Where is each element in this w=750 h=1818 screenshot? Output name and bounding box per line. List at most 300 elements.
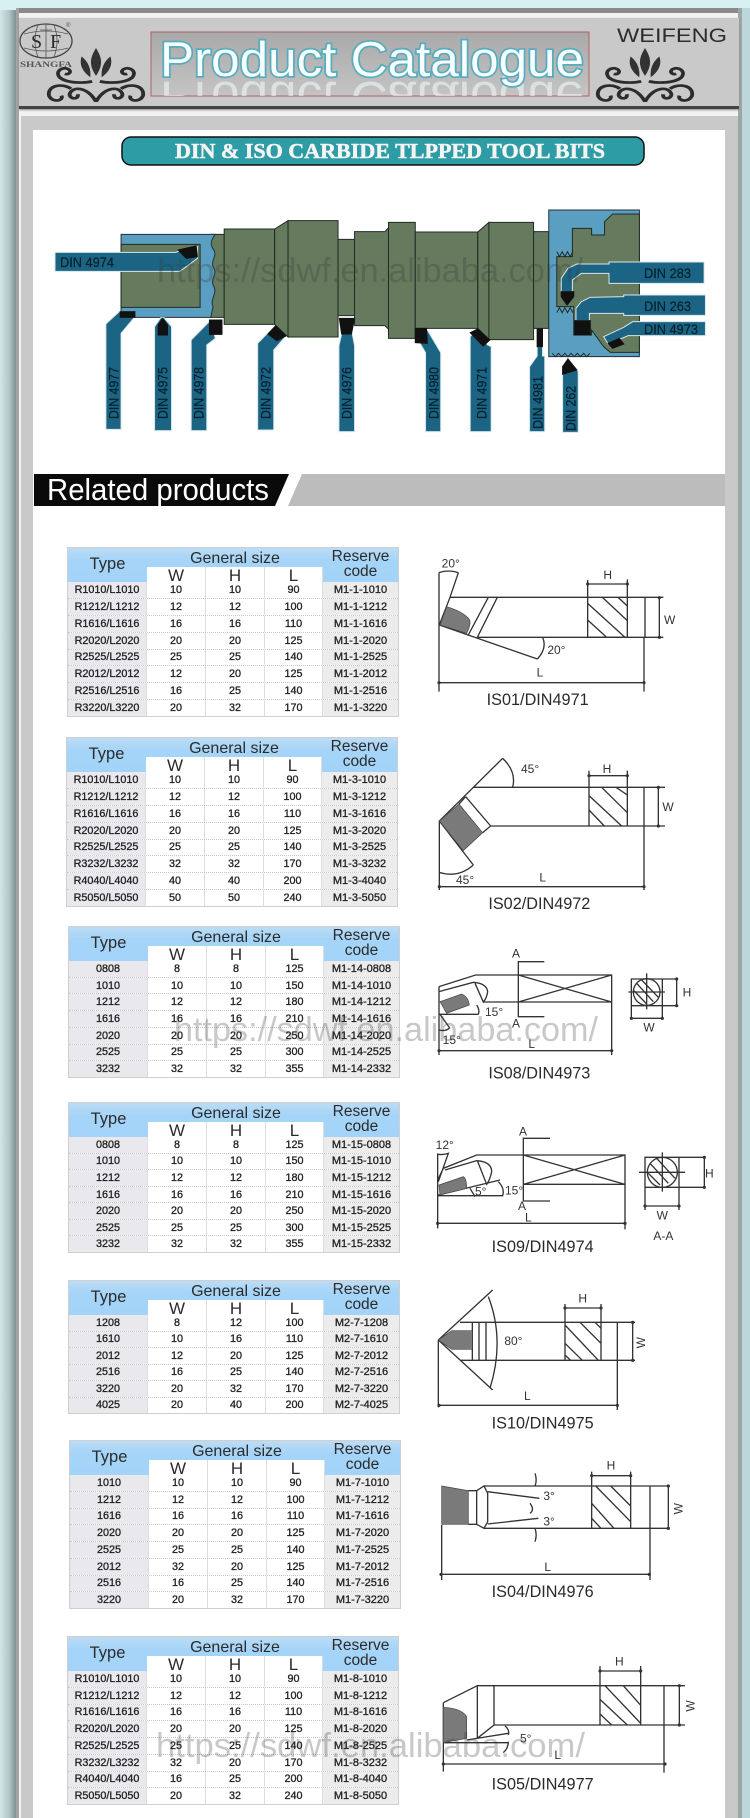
drawing IS08/DIN4973: W bbox=[643, 1020, 655, 1034]
table 1 rows: R1212/L1212 bbox=[75, 601, 139, 613]
tool DIN 263 bbox=[575, 295, 705, 335]
table 6 rows: 2020 bbox=[97, 1527, 121, 1539]
table 7 rows: 200 bbox=[284, 1773, 302, 1785]
table 2 rows: R5050/L5050 bbox=[74, 892, 138, 904]
table 4 rows: M1-15-2020 bbox=[332, 1205, 391, 1217]
table 5 rows: 20 bbox=[230, 1350, 242, 1362]
table 2 rows: 32 bbox=[228, 858, 240, 870]
drawing IS02/DIN4972: L bbox=[539, 871, 546, 885]
table 1 rows: R2020/L2020 bbox=[75, 635, 139, 647]
table 4 header: Type bbox=[91, 1110, 126, 1128]
table 6 rows: 1616 bbox=[97, 1510, 121, 1522]
brand name: WEIFENG bbox=[617, 25, 727, 47]
table 6 rows: 10 bbox=[231, 1477, 243, 1489]
table 3 rows: 25 bbox=[230, 1046, 242, 1058]
table 1 rows: 12 bbox=[170, 601, 182, 613]
table 6 rows: M1-7-2020 bbox=[336, 1527, 389, 1539]
table 5 rows: M2-7-2012 bbox=[335, 1350, 388, 1362]
table 1 rows: M1-1-1616 bbox=[334, 618, 387, 630]
table 5 rows: 12 bbox=[230, 1317, 242, 1329]
drawing IS05/DIN4977: L bbox=[554, 1748, 561, 1762]
table 2 rows: M1-3-1616 bbox=[333, 808, 386, 820]
table 5 rows: M2-7-3220 bbox=[335, 1383, 388, 1395]
table 7 rows: 12 bbox=[170, 1690, 182, 1702]
table 7 rows: R3232/L3232 bbox=[75, 1757, 139, 1769]
lathe tooling diagram bbox=[55, 210, 705, 432]
tool labels: DIN 4975 bbox=[156, 367, 170, 419]
drawing IS10/DIN4975: W bbox=[634, 1336, 648, 1348]
table 4 rows: 16 bbox=[171, 1189, 183, 1201]
drawing IS01/DIN4971: W bbox=[664, 613, 676, 627]
tool labels bbox=[60, 255, 698, 431]
table 1 rows: M1-1-1010 bbox=[334, 584, 387, 596]
table 7 rows: 100 bbox=[284, 1690, 302, 1702]
drawing IS04/DIN4976: 3° bbox=[543, 1515, 555, 1529]
tool DIN 4971 bbox=[470, 329, 491, 432]
drawing IS02/DIN4972: 45° bbox=[456, 873, 474, 887]
table 6 rows: 125 bbox=[286, 1527, 304, 1539]
table 2 rows: M1-3-2525 bbox=[333, 841, 386, 853]
table 3 rows: 25 bbox=[171, 1046, 183, 1058]
drawing IS08/DIN4973: L bbox=[528, 1037, 535, 1051]
drawing IS09/DIN4974: A bbox=[519, 1125, 527, 1139]
table 7 rows: 170 bbox=[284, 1757, 302, 1769]
table 2 rows: 20 bbox=[228, 825, 240, 837]
drawing IS10/DIN4975: 80° bbox=[504, 1334, 523, 1348]
table 1 header: Reserve bbox=[332, 548, 389, 565]
table 3 rows: 2525 bbox=[96, 1046, 120, 1058]
table 1 rows: R3220/L3220 bbox=[75, 702, 139, 714]
table 1 rows bbox=[68, 582, 398, 716]
drawing IS09/DIN4974: W bbox=[657, 1209, 669, 1223]
drawing IS02/DIN4972 bbox=[439, 758, 674, 913]
table 7 header: Reserve bbox=[332, 1637, 389, 1654]
table 1 bbox=[68, 548, 398, 716]
table 4 rows: 180 bbox=[285, 1172, 304, 1184]
table 5 rows: 32 bbox=[230, 1383, 242, 1395]
table 7 rows: 20 bbox=[229, 1723, 241, 1735]
table 6 rows: M1-7-2012 bbox=[336, 1561, 389, 1573]
table 5 rows: M2-7-1208 bbox=[335, 1317, 388, 1329]
table 6 rows: 16 bbox=[172, 1577, 184, 1589]
drawing IS04/DIN4976: W bbox=[671, 1502, 685, 1514]
drawing IS10/DIN4975: H bbox=[578, 1292, 587, 1306]
right chuck bbox=[549, 210, 639, 357]
table 6 rows: 16 bbox=[231, 1510, 243, 1522]
drawing IS08/DIN4973: 15° bbox=[443, 1033, 461, 1047]
table 5 header: Type bbox=[91, 1288, 126, 1306]
table 1 rows: 16 bbox=[229, 618, 241, 630]
table 3 bbox=[69, 927, 399, 1077]
table 2 rows: 40 bbox=[228, 875, 240, 887]
table 3 rows: 12 bbox=[171, 996, 183, 1008]
table 3 rows: 12 bbox=[230, 996, 242, 1008]
table 2 rows: M1-3-2020 bbox=[333, 825, 386, 837]
tool labels: DIN 4974 bbox=[60, 255, 114, 270]
table 7 rows: R1212/L1212 bbox=[75, 1690, 139, 1702]
table 5 header: General size bbox=[191, 1283, 281, 1300]
table 6 rows bbox=[70, 1475, 400, 1608]
table 2 rows: 16 bbox=[169, 808, 181, 820]
drawing IS09/DIN4974: 5° bbox=[475, 1185, 487, 1199]
table 1 rows: 140 bbox=[284, 651, 302, 663]
tool labels: DIN 4976 bbox=[340, 367, 354, 419]
drawing IS02/DIN4972: H bbox=[603, 762, 611, 776]
table 6 rows: 140 bbox=[286, 1577, 304, 1589]
table 3 rows: M1-14-2020 bbox=[332, 1030, 391, 1042]
drawing IS05/DIN4977: 5° bbox=[520, 1731, 532, 1745]
table 4 header bbox=[69, 1103, 399, 1137]
table 5 header: Reserve bbox=[333, 1281, 390, 1298]
table 7 header: General size bbox=[190, 1639, 280, 1656]
table 2 rows: R1212/L1212 bbox=[74, 791, 138, 803]
table 6 rows: 12 bbox=[231, 1494, 243, 1506]
tool DIN 4973 bbox=[604, 322, 705, 348]
table 4 rows: 355 bbox=[285, 1238, 304, 1250]
table 2 rows: 20 bbox=[169, 825, 181, 837]
table 4 rows: 25 bbox=[230, 1222, 242, 1234]
table 4 rows: 12 bbox=[230, 1172, 242, 1184]
table 2 rows: R4040/L4040 bbox=[74, 875, 138, 887]
table 1 rows: 25 bbox=[229, 685, 241, 697]
tool labels: DIN 4973 bbox=[644, 322, 698, 337]
table 5 header: L bbox=[290, 1299, 299, 1318]
related products banner bbox=[34, 472, 725, 507]
table 6 rows: 1212 bbox=[97, 1494, 121, 1506]
left chuck bbox=[121, 234, 215, 317]
drawing IS08/DIN4973: A bbox=[512, 1016, 520, 1030]
table 6 rows: 20 bbox=[172, 1527, 184, 1539]
drawing IS05/DIN4977: H bbox=[615, 1655, 624, 1669]
table 7 header: Type bbox=[90, 1644, 125, 1662]
table 3 header: Type bbox=[91, 934, 126, 952]
table 4 rows: 2525 bbox=[96, 1222, 120, 1234]
tool labels: DIN 4981 bbox=[530, 376, 546, 429]
logo bbox=[20, 22, 72, 69]
table 4 rows: 1616 bbox=[96, 1189, 120, 1201]
table 4 rows: M1-15-0808 bbox=[332, 1139, 391, 1151]
drawing IS10/DIN4975 bbox=[438, 1290, 648, 1433]
table 3 rows bbox=[69, 961, 399, 1077]
table 4 rows: 1010 bbox=[96, 1155, 120, 1167]
tool labels: DIN 4978 bbox=[192, 367, 206, 419]
table 5 rows: 3220 bbox=[96, 1383, 120, 1395]
table 5 rows: 12 bbox=[171, 1350, 183, 1362]
table 7 rows: 16 bbox=[170, 1773, 182, 1785]
table 3 rows: 10 bbox=[230, 980, 242, 992]
header artwork bbox=[19, 22, 726, 506]
table 2 rows: 12 bbox=[228, 791, 240, 803]
drawing IS04/DIN4976: 3° bbox=[543, 1489, 555, 1503]
table 1 header: Type bbox=[90, 555, 125, 573]
drawing IS04/DIN4976: H bbox=[607, 1458, 615, 1472]
drawing IS09/DIN4974: H bbox=[705, 1166, 714, 1180]
table 7 rows: 10 bbox=[229, 1673, 241, 1685]
table 5 rows: M2-7-4025 bbox=[335, 1399, 388, 1411]
table 3 rows: M1-14-1212 bbox=[332, 996, 391, 1008]
drawing IS09/DIN4974: IS09/DIN4974 bbox=[492, 1237, 594, 1256]
table 4 bbox=[69, 1103, 399, 1252]
table 6 rows: 20 bbox=[231, 1527, 243, 1539]
table 1 rows: 12 bbox=[170, 668, 182, 680]
table 4 rows: M1-15-1010 bbox=[332, 1155, 391, 1167]
table 5 rows: 20 bbox=[171, 1399, 183, 1411]
drawing IS01/DIN4971: H bbox=[603, 568, 612, 582]
table 2 rows: R2020/L2020 bbox=[74, 825, 138, 837]
table 1 rows: 32 bbox=[229, 702, 241, 714]
table 6 header: W bbox=[170, 1459, 186, 1478]
related products banner: Related products bbox=[47, 472, 269, 507]
table 2 header bbox=[67, 738, 397, 772]
table 6 rows: 12 bbox=[172, 1494, 184, 1506]
table 5 rows: 40 bbox=[230, 1399, 242, 1411]
table 4 rows: 0808 bbox=[96, 1139, 120, 1151]
table 5 rows: 4025 bbox=[96, 1399, 120, 1411]
table 7 rows: M1-8-2525 bbox=[334, 1740, 387, 1752]
watermark bottom: https://sdwf.en.alibaba.com/ bbox=[156, 1727, 586, 1765]
table 7 rows: 32 bbox=[170, 1757, 182, 1769]
table 6 rows: 125 bbox=[286, 1561, 304, 1573]
table 6 rows: 25 bbox=[231, 1544, 243, 1556]
tool labels: DIN 4972 bbox=[258, 367, 274, 419]
drawing IS02/DIN4972: 45° bbox=[521, 762, 539, 776]
drawing IS09/DIN4974: A bbox=[518, 1199, 526, 1213]
logo: F bbox=[50, 31, 61, 53]
table 2 rows: 50 bbox=[169, 892, 181, 904]
table 4 header: H bbox=[230, 1121, 242, 1140]
table 5 header: H bbox=[230, 1299, 242, 1318]
table 3 rows: 1212 bbox=[96, 996, 120, 1008]
table 7 header bbox=[68, 1637, 398, 1671]
table 5 rows: 25 bbox=[230, 1366, 242, 1378]
table 7 rows: 25 bbox=[170, 1740, 182, 1752]
table 7 rows: 20 bbox=[229, 1757, 241, 1769]
tool DIN 4978 bbox=[191, 320, 222, 431]
table 6 rows: 20 bbox=[231, 1561, 243, 1573]
table 1 rows: M1-1-2012 bbox=[334, 668, 387, 680]
drawing IS01/DIN4971: L bbox=[537, 666, 544, 680]
table 4 rows: 1212 bbox=[96, 1172, 120, 1184]
table 4 rows: 12 bbox=[171, 1172, 183, 1184]
drawing IS09/DIN4974: L bbox=[525, 1211, 532, 1225]
table 2 rows: R2525/L2525 bbox=[74, 841, 138, 853]
table 4 rows: 300 bbox=[285, 1222, 304, 1234]
drawing IS08/DIN4973 bbox=[439, 946, 691, 1083]
table 3 rows: 250 bbox=[285, 1030, 304, 1042]
table 6 rows: M1-7-2525 bbox=[336, 1544, 389, 1556]
table 6 rows: 2012 bbox=[97, 1561, 121, 1573]
table 2 rows: 110 bbox=[284, 808, 301, 820]
table 5 rows bbox=[69, 1315, 399, 1413]
table 2 rows: R1616/L1616 bbox=[74, 808, 138, 820]
table 6 rows: M1-7-2516 bbox=[336, 1577, 389, 1589]
table 4 header: Reserve bbox=[333, 1103, 390, 1120]
table 1 rows: 20 bbox=[170, 702, 182, 714]
table 2 header: L bbox=[288, 756, 297, 775]
drawing IS04/DIN4976 bbox=[441, 1458, 685, 1601]
table 6 rows: M1-7-3220 bbox=[336, 1594, 389, 1606]
table 4 rows: 150 bbox=[285, 1155, 304, 1167]
table 2 rows: 10 bbox=[228, 774, 240, 786]
table 1 rows: 170 bbox=[284, 702, 302, 714]
tool labels: DIN 283 bbox=[644, 266, 691, 281]
table 3 rows: 8 bbox=[233, 963, 239, 975]
table 7 rows: M1-8-1212 bbox=[334, 1690, 387, 1702]
table 3 rows: 1010 bbox=[96, 980, 120, 992]
table 3 rows: 16 bbox=[230, 1013, 242, 1025]
table 6 rows: M1-7-1616 bbox=[336, 1510, 389, 1522]
table 6 rows: 90 bbox=[289, 1477, 302, 1489]
table 3 header bbox=[69, 927, 399, 961]
table 5 rows: 200 bbox=[285, 1399, 304, 1411]
table 4 rows: 125 bbox=[285, 1139, 304, 1151]
table 4 rows: 8 bbox=[174, 1139, 180, 1151]
table 4 rows: 32 bbox=[171, 1238, 183, 1250]
table 4 rows: 10 bbox=[171, 1155, 183, 1167]
table 1 header: W bbox=[168, 566, 184, 585]
table 1 rows: R1616/L1616 bbox=[75, 618, 139, 630]
table 7 rows: R1010/L1010 bbox=[75, 1673, 139, 1685]
table 7 rows: M1-8-1616 bbox=[334, 1706, 387, 1718]
table 3 rows: M1-14-1616 bbox=[332, 1013, 391, 1025]
table 4 rows bbox=[69, 1137, 399, 1252]
drawing IS01/DIN4971: IS01/DIN4971 bbox=[487, 690, 589, 709]
drawing IS09/DIN4974: 12° bbox=[436, 1138, 454, 1152]
table 6 header: Type bbox=[92, 1448, 127, 1466]
table 5 bbox=[69, 1281, 399, 1413]
table 5 rows: 125 bbox=[285, 1350, 304, 1362]
table 2 rows: M1-3-3232 bbox=[333, 858, 386, 870]
tool DIN 4981 bbox=[530, 329, 545, 432]
table 3 rows: 10 bbox=[171, 980, 183, 992]
table 7 rows: 140 bbox=[284, 1740, 302, 1752]
drawing IS02/DIN4972: W bbox=[662, 800, 674, 814]
table 5 rows: 16 bbox=[230, 1333, 242, 1345]
table 1 rows: M1-1-2516 bbox=[334, 685, 387, 697]
table 2 rows: R3232/L3232 bbox=[74, 858, 138, 870]
table 4 header: W bbox=[169, 1121, 185, 1140]
drawing IS01/DIN4971 bbox=[439, 556, 676, 709]
table 1 header: H bbox=[229, 566, 241, 585]
tool DIN 4977 bbox=[106, 312, 135, 429]
header bar bbox=[19, 18, 739, 109]
watermark top: https://sdwf.en.alibaba.com/ bbox=[157, 252, 584, 290]
table 6 rows: 16 bbox=[172, 1510, 184, 1522]
table 2 header: Type bbox=[89, 745, 124, 763]
table 7 rows bbox=[68, 1671, 398, 1804]
drawing IS10/DIN4975: L bbox=[524, 1389, 531, 1403]
table 4 rows: 210 bbox=[285, 1189, 304, 1201]
table 6 rows: M1-7-1212 bbox=[336, 1494, 389, 1506]
table 3 header: code bbox=[345, 942, 378, 958]
table 5 rows: M2-7-1610 bbox=[335, 1333, 388, 1345]
table 5 rows: 1208 bbox=[96, 1317, 120, 1329]
table 1 rows: 20 bbox=[170, 635, 182, 647]
table 5 header: code bbox=[345, 1296, 378, 1312]
table 7 header: H bbox=[229, 1655, 241, 1674]
table 6 rows: 10 bbox=[172, 1477, 184, 1489]
table 6 rows: 3220 bbox=[97, 1594, 121, 1606]
table 3 rows: 355 bbox=[285, 1063, 304, 1075]
table 2 header: H bbox=[228, 756, 240, 775]
workpiece bbox=[211, 221, 549, 340]
table 1 rows: 16 bbox=[170, 618, 182, 630]
table 1 header: L bbox=[289, 566, 298, 585]
table 6 rows: 2516 bbox=[97, 1577, 121, 1589]
table 1 rows: 10 bbox=[170, 584, 182, 596]
table 6 rows: 140 bbox=[286, 1544, 304, 1556]
table 4 rows: 20 bbox=[230, 1205, 242, 1217]
table 5 rows: 2516 bbox=[96, 1366, 120, 1378]
table 4 header: code bbox=[345, 1118, 378, 1134]
drawing IS01/DIN4971: 20° bbox=[547, 643, 566, 657]
table 3 rows: 300 bbox=[285, 1046, 304, 1058]
table 2 rows: 25 bbox=[169, 841, 181, 853]
table 2 rows: 170 bbox=[283, 858, 302, 870]
table 1 rows: 25 bbox=[170, 651, 182, 663]
table 5 rows: 8 bbox=[174, 1317, 180, 1329]
drawing IS09/DIN4974 bbox=[436, 1125, 714, 1256]
tool labels: DIN 263 bbox=[644, 299, 691, 314]
table 7 rows: R2020/L2020 bbox=[75, 1723, 139, 1735]
table 6 rows: 110 bbox=[287, 1510, 304, 1522]
table 5 rows: 2012 bbox=[96, 1350, 120, 1362]
table 3 rows: M1-14-2332 bbox=[332, 1063, 391, 1075]
table 2 rows: 32 bbox=[169, 858, 181, 870]
table 5 header bbox=[69, 1281, 399, 1315]
table 4 rows: 16 bbox=[230, 1189, 242, 1201]
table 5 rows: M2-7-2516 bbox=[335, 1366, 388, 1378]
table 4 rows: 2020 bbox=[96, 1205, 120, 1217]
table 5 rows: 170 bbox=[285, 1383, 304, 1395]
table 4 header: General size bbox=[191, 1105, 281, 1122]
table 2 header: Reserve bbox=[331, 738, 388, 755]
table 4 rows: 8 bbox=[233, 1139, 239, 1151]
tool labels: DIN 4980 bbox=[426, 367, 442, 419]
drawing IS04/DIN4976: IS04/DIN4976 bbox=[492, 1582, 594, 1601]
table 1 header: code bbox=[344, 562, 377, 580]
tool DIN 4980 bbox=[415, 328, 441, 432]
table 1 rows: 20 bbox=[229, 668, 241, 680]
table 2 rows: 125 bbox=[283, 825, 302, 837]
table 7 rows: 16 bbox=[229, 1706, 241, 1718]
table 1 rows: R2525/L2525 bbox=[75, 651, 139, 663]
table 2 header: W bbox=[167, 756, 183, 775]
table 2 rows: M1-3-4040 bbox=[333, 875, 386, 887]
table 1 rows: 140 bbox=[284, 685, 302, 697]
table 1 rows: 25 bbox=[229, 651, 241, 663]
table 3 rows: 0808 bbox=[96, 963, 120, 975]
table 3 rows: 180 bbox=[285, 996, 304, 1008]
table 6 bbox=[70, 1441, 400, 1608]
table 2 rows: 40 bbox=[169, 875, 181, 887]
drawing IS10/DIN4975: IS10/DIN4975 bbox=[492, 1414, 594, 1433]
table 7 rows: R2525/L2525 bbox=[75, 1740, 139, 1752]
table 3 rows: M1-14-2525 bbox=[332, 1046, 391, 1058]
drawing IS02/DIN4972: IS02/DIN4972 bbox=[488, 894, 590, 913]
table 4 rows: 10 bbox=[230, 1155, 242, 1167]
table 2 rows: 90 bbox=[286, 774, 298, 786]
table 2 rows: 50 bbox=[228, 892, 240, 904]
table 5 rows: 10 bbox=[171, 1333, 183, 1345]
table 6 rows: 32 bbox=[231, 1594, 243, 1606]
table 4 rows: M1-15-1212 bbox=[332, 1172, 391, 1184]
table 1 rows: R1010/L1010 bbox=[75, 584, 139, 596]
logo: ® bbox=[66, 22, 71, 29]
table 1 rows: R2516/L2516 bbox=[75, 685, 139, 697]
table 7 rows: M1-8-4040 bbox=[334, 1773, 387, 1785]
table 7 rows: 12 bbox=[229, 1690, 241, 1702]
